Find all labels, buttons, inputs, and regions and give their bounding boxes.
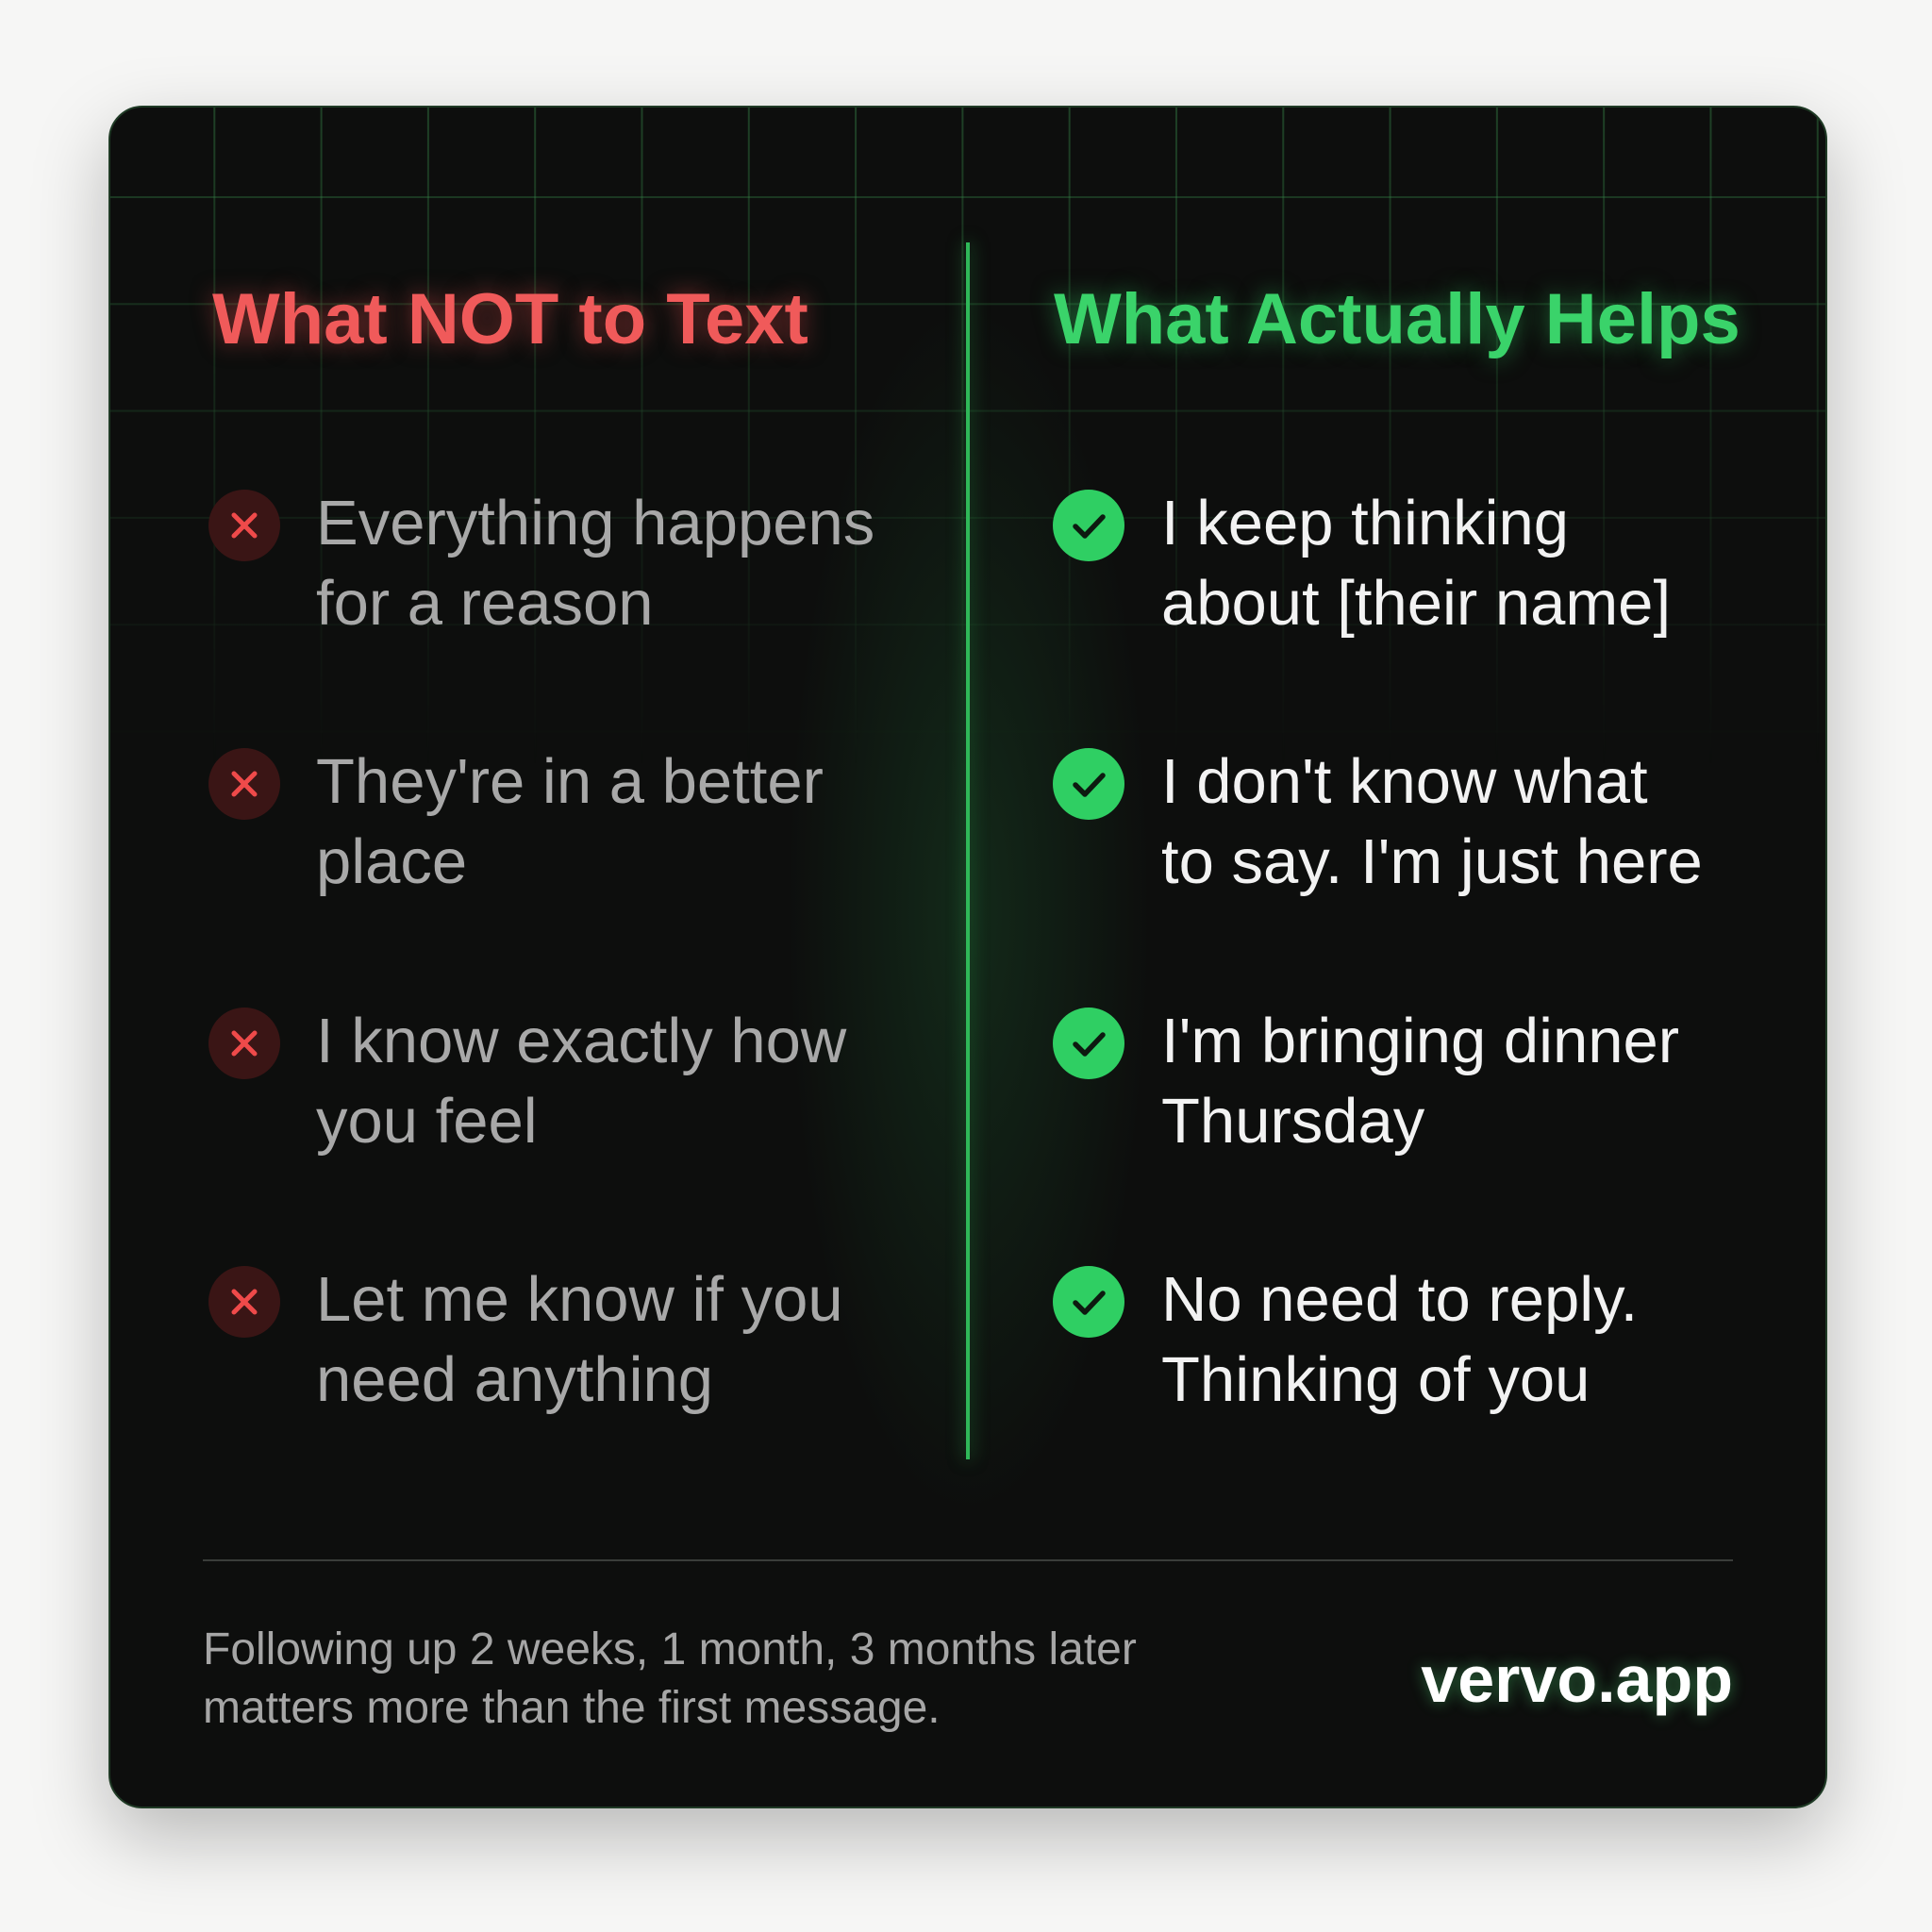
vertical divider: [966, 242, 970, 1459]
item: check2: [1053, 746, 1703, 897]
item: x3: you feel: [316, 1086, 538, 1157]
item: x3: [208, 1006, 847, 1157]
item: check3: [1053, 1006, 1679, 1157]
heading: what not to text: What NOT to Text: [212, 279, 808, 359]
item: check2: I don't know what: [1161, 746, 1648, 817]
item: check1: about [their name]: [1161, 568, 1671, 639]
item: x4: Let me know if you: [316, 1264, 843, 1335]
footer note: [203, 1624, 1137, 1733]
item: x2: place: [316, 826, 467, 897]
item: check2: to say. I'm just here: [1161, 826, 1703, 897]
card: [108, 106, 1827, 1808]
item: check4: [1053, 1264, 1638, 1415]
brand: vervo.app: [1421, 1642, 1733, 1716]
item: x3: I know exactly how: [316, 1006, 846, 1076]
heading: what actually helps: What Actually Helps: [1054, 279, 1740, 359]
item: x2: They're in a better: [316, 746, 824, 817]
item: check4: No need to reply.: [1161, 1264, 1638, 1335]
item: x4: [208, 1264, 843, 1415]
item: x1: for a reason: [316, 568, 654, 639]
item: check3: I'm bringing dinner: [1161, 1006, 1679, 1076]
item: x1: [208, 488, 874, 639]
footer note: Following up 2 weeks, 1 month, 3 months later: [203, 1624, 1137, 1674]
item: check1: I keep thinking: [1161, 488, 1569, 558]
item: x4: need anything: [316, 1344, 713, 1415]
item: check4: Thinking of you: [1161, 1344, 1590, 1415]
item: x1: Everything happens: [316, 488, 874, 558]
item: check3: Thursday: [1161, 1086, 1424, 1157]
item: x2: [208, 746, 824, 897]
item: check1: [1053, 488, 1671, 639]
footer note: matters more than the first message.: [203, 1683, 941, 1733]
